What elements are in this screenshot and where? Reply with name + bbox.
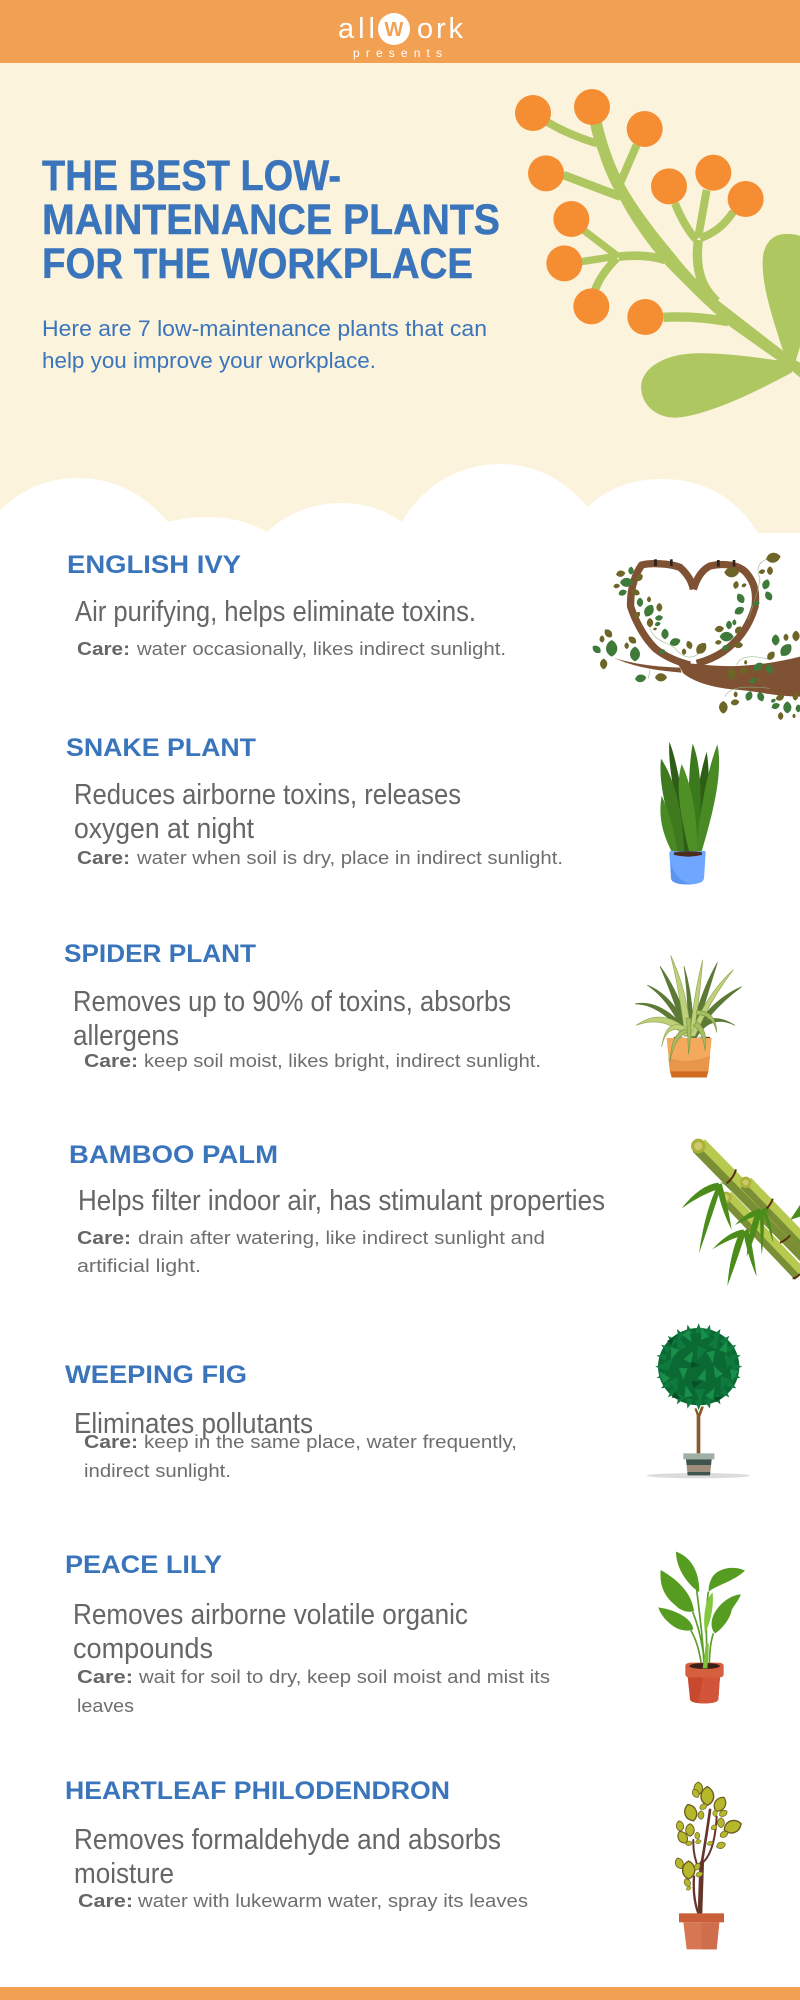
title: MAINTENANCE PLANTS xyxy=(42,196,500,244)
icon: bamboo stalks xyxy=(682,1139,800,1286)
description xyxy=(74,1824,501,1890)
icon: ivy heart on a branch xyxy=(591,552,800,720)
entry: Heartleaf Philodendron xyxy=(65,1777,528,1911)
title xyxy=(42,152,500,288)
heading: SPIDER PLANT xyxy=(64,940,256,968)
heading: BAMBOO PALM xyxy=(69,1141,278,1169)
description: oxygen at night xyxy=(74,813,254,845)
description xyxy=(74,779,461,845)
logo xyxy=(338,13,464,60)
care text xyxy=(84,1432,517,1481)
care text: Care: xyxy=(84,1432,138,1452)
care text: artificial light. xyxy=(77,1256,201,1276)
care text: keep soil moist, likes bright, indirect sunlight. xyxy=(144,1051,541,1071)
description: moisture xyxy=(74,1858,174,1890)
care text: Care: xyxy=(77,1228,131,1248)
care text: Care: xyxy=(77,639,130,659)
care text: indirect sunlight. xyxy=(84,1461,231,1481)
subtitle: help you improve your workplace. xyxy=(42,348,376,373)
description: Air purifying, helps eliminate toxins. xyxy=(75,596,476,628)
care text: leaves xyxy=(77,1696,134,1716)
care text: water occasionally, likes indirect sunlight. xyxy=(136,639,506,659)
care text: drain after watering, like indirect sunlight and xyxy=(138,1228,545,1248)
heading: HEARTLEAF PHILODENDRON xyxy=(65,1777,450,1805)
main stem xyxy=(590,122,800,377)
description: Helps filter indoor air, has stimulant properties xyxy=(78,1185,605,1217)
header bar xyxy=(0,0,800,63)
hero background with cloud edge xyxy=(0,63,800,533)
hero illustration: branch with orange berries xyxy=(515,89,800,418)
care text: wait for soil to dry, keep soil moist and mist its xyxy=(138,1667,550,1687)
description: Eliminates pollutants xyxy=(74,1408,313,1440)
icon: spider plant in orange pot xyxy=(635,955,742,1077)
title: THE BEST LOW- xyxy=(42,152,341,200)
entry: Peace Lily xyxy=(65,1551,550,1716)
icon: heartleaf philodendron in pot xyxy=(674,1782,743,1949)
title: FOR THE WORKPLACE xyxy=(42,240,473,288)
logo: W xyxy=(385,19,404,41)
care text: Care: xyxy=(77,1667,133,1687)
care text: Care: xyxy=(84,1051,138,1071)
lower leaf xyxy=(641,353,795,418)
care text: water when soil is dry, place in indirect sunlight. xyxy=(136,848,563,868)
care text: Care: xyxy=(78,1891,133,1911)
entry: Weeping Fig xyxy=(65,1361,517,1481)
subtitle xyxy=(42,316,487,373)
description: allergens xyxy=(73,1020,179,1052)
care text: keep in the same place, water frequently, xyxy=(144,1432,517,1452)
care text xyxy=(77,1667,550,1716)
entry: Snake Plant xyxy=(66,734,563,868)
logo: presents xyxy=(353,46,442,60)
description: Removes formaldehyde and absorbs xyxy=(74,1824,501,1856)
description: Reduces airborne toxins, releases xyxy=(74,779,461,811)
description xyxy=(73,1599,468,1665)
footer bar xyxy=(0,1987,800,2000)
entry: Spider Plant xyxy=(64,940,541,1071)
description: Removes airborne volatile organic xyxy=(73,1599,468,1631)
care text xyxy=(77,1228,545,1276)
entry: Bamboo Palm xyxy=(69,1141,605,1276)
icon: peace lily in terracotta pot xyxy=(658,1552,745,1703)
heading: SNAKE PLANT xyxy=(66,734,256,762)
upper leaf xyxy=(763,234,800,363)
subtitle: Here are 7 low-maintenance plants that can xyxy=(42,316,487,341)
care text: water with lukewarm water, spray its leaves xyxy=(137,1891,528,1911)
care text: Care: xyxy=(77,848,130,868)
logo: ork xyxy=(417,13,464,45)
description: compounds xyxy=(73,1633,213,1665)
heading: ENGLISH IVY xyxy=(67,551,241,579)
heading: PEACE LILY xyxy=(65,1551,222,1579)
heading: WEEPING FIG xyxy=(65,1361,247,1389)
logo: all xyxy=(338,13,375,45)
icon: snake plant in blue pot xyxy=(660,742,719,884)
icon: potted fig tree xyxy=(647,1323,750,1478)
entry: English Ivy xyxy=(67,551,506,659)
description: Removes up to 90% of toxins, absorbs xyxy=(73,986,511,1018)
description xyxy=(73,986,511,1052)
